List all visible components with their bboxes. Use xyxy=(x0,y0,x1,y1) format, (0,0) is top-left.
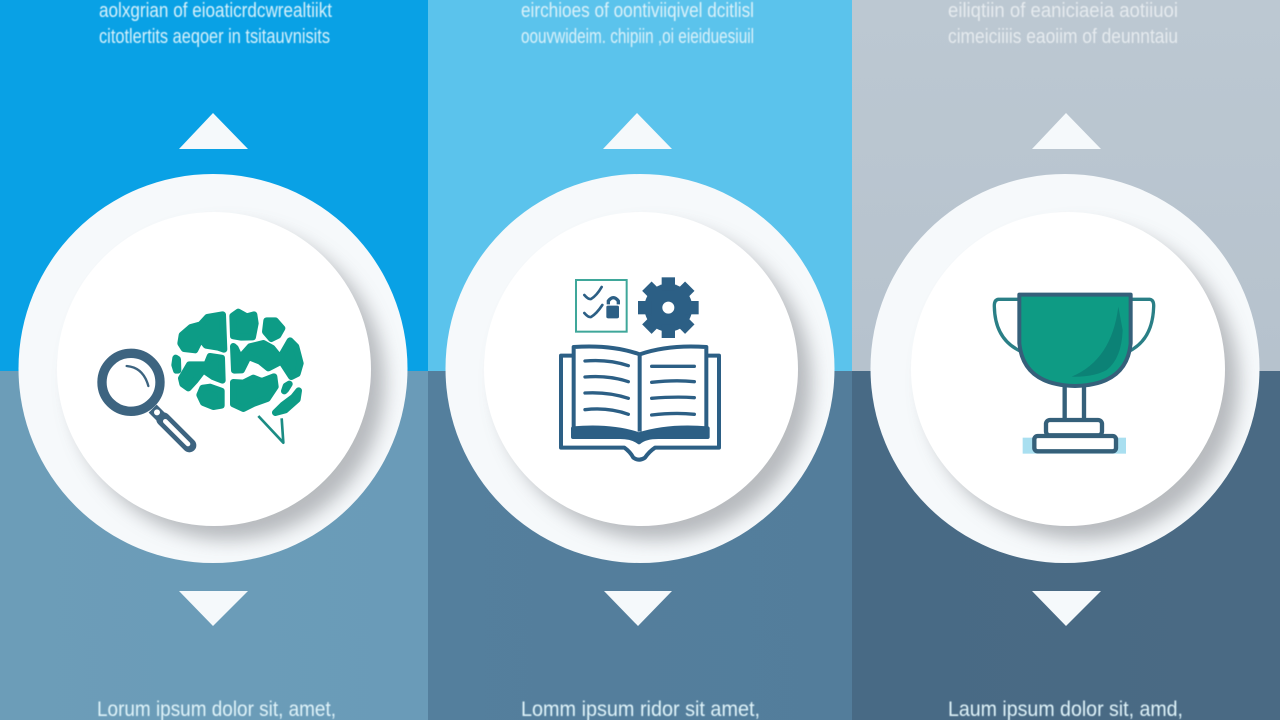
trophy handles xyxy=(994,299,1154,352)
icon: gear xyxy=(638,277,699,338)
trophy cup xyxy=(1019,295,1131,386)
icon: magnifier and brain xyxy=(102,312,300,445)
text block: column 2 top: oouvwideim. chipiin ,oi eieiduesiuil xyxy=(521,26,754,48)
icon: brain xyxy=(175,312,300,443)
arrow: column 2 up xyxy=(603,113,672,149)
circle: column 2 xyxy=(446,174,834,563)
arrow: column 1 down xyxy=(179,591,248,626)
panel: column 1 background xyxy=(0,0,428,720)
text block: column 3 top: cimeiciiiis eaoiim of deunntaiu xyxy=(948,26,1178,48)
trophy base xyxy=(1023,387,1126,454)
panel: column 3 background xyxy=(852,0,1280,720)
icon: open book xyxy=(561,346,719,460)
arrow: column 2 down xyxy=(604,591,672,626)
text block: column 1 top: aolxgrian of eioaticrdcwrealtiikt xyxy=(99,0,332,22)
panel: column 2 background xyxy=(428,0,852,720)
text block: column 1 top: citotlertits aeqoer in tsitauvnisits xyxy=(99,26,330,48)
arrow: column 3 down xyxy=(1032,591,1101,626)
icon: checklist, gear and book xyxy=(561,277,719,460)
text block: column 3 top xyxy=(948,0,1178,48)
circle: column 3 xyxy=(870,174,1260,563)
arrow: column 3 up xyxy=(1032,113,1101,149)
text block: column 1 top xyxy=(99,0,332,48)
icon: magnifier xyxy=(102,353,189,445)
text block: column 2 top xyxy=(521,0,754,48)
arrow: column 1 up xyxy=(179,113,248,149)
text block: column 2 top: eirchioes of oontiviiqivel dcitlisl xyxy=(521,0,754,22)
circle: column 1 xyxy=(18,174,408,563)
icon: checklist xyxy=(576,280,627,332)
text block: column 3 top: eiliqtiin of eaniciaeia aotiiuoi xyxy=(948,0,1178,22)
icon: trophy xyxy=(994,295,1154,454)
